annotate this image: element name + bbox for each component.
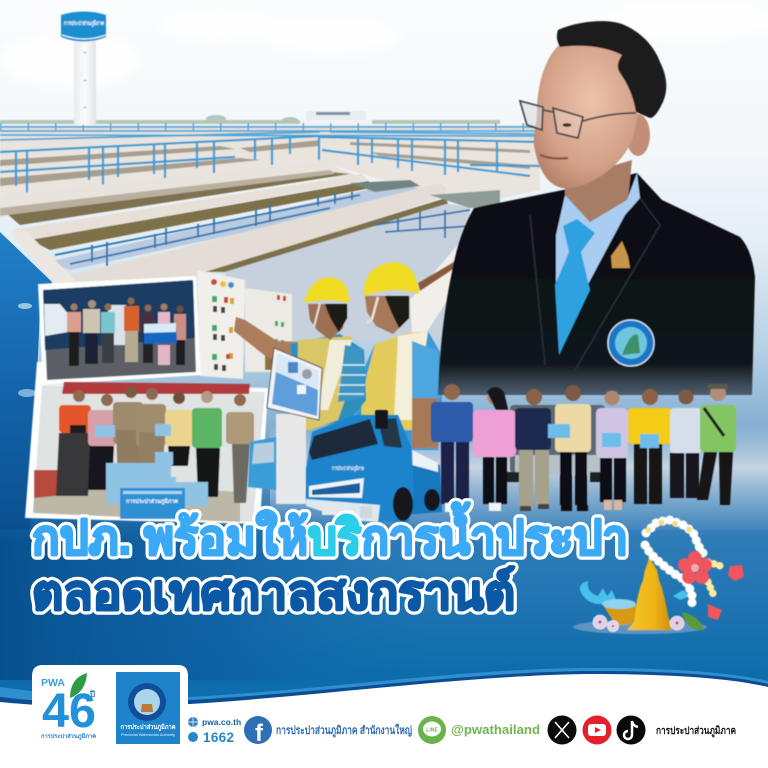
46th anniversary logo: 46 xyxy=(42,685,96,738)
lower left deep blue glow xyxy=(0,489,348,680)
horizon tree line xyxy=(0,115,500,124)
red flower xyxy=(678,551,712,584)
tiktok icon xyxy=(616,716,646,744)
headline line 1: กปภ. พร้อมให้บริการน้ำประปา xyxy=(32,502,628,565)
logo card xyxy=(32,665,188,768)
youtube icon xyxy=(582,716,612,744)
46th anniversary logo: ปี xyxy=(89,689,95,699)
golden sand stupa xyxy=(627,543,672,630)
far decks xyxy=(0,140,530,186)
headline line 2: ตลอดเทศกาลสงกรานต์ xyxy=(32,566,515,620)
social name: การประปาส่วนภูมิภาค xyxy=(656,725,736,738)
facebook: การประปาส่วนภูมิภาค สำนักงานใหญ่ xyxy=(276,723,412,738)
people xyxy=(56,386,254,503)
pin: royal emblem xyxy=(611,241,630,268)
Songkran decoration xyxy=(573,520,744,634)
upper water channel xyxy=(48,186,430,270)
woman in pink floral xyxy=(473,387,516,511)
headline xyxy=(32,502,628,620)
water tower xyxy=(61,12,106,125)
front railing left xyxy=(0,136,319,195)
line: @pwathailand xyxy=(451,722,540,737)
46th anniversary logo: PWA xyxy=(41,677,65,689)
control panel cabinets xyxy=(197,270,292,379)
neck xyxy=(565,160,632,222)
PWA emblem square: Provincial Waterworks Authority xyxy=(121,732,175,737)
people xyxy=(67,298,186,366)
lower water xyxy=(225,204,470,340)
purple flowers xyxy=(593,615,684,632)
face xyxy=(534,42,638,188)
man in floral shirt with water pack xyxy=(548,385,591,511)
water treatment plant photo xyxy=(0,111,540,340)
PWA emblem square xyxy=(116,672,180,744)
46th anniversary logo: การประปาส่วนภูมิภาค xyxy=(41,732,96,741)
tie xyxy=(555,219,595,355)
base shadow xyxy=(573,620,707,634)
jasmine garland xyxy=(645,520,724,607)
suit jacket xyxy=(438,173,755,395)
sky clouds xyxy=(0,2,768,86)
water bowl xyxy=(603,605,636,625)
reflected railing 1 xyxy=(55,192,360,266)
eye xyxy=(562,123,572,127)
distant building xyxy=(300,111,372,125)
website and hotline: 1662 xyxy=(203,730,234,745)
reflected railing 2 xyxy=(375,210,470,238)
website and hotline xyxy=(188,717,241,745)
lapel lines xyxy=(530,198,660,370)
donation sign: การประปาส่วนภูมิภาค xyxy=(126,497,178,506)
headline line 2: ตลอดเทศกาลสงกรานต์ xyxy=(32,566,515,620)
banner xyxy=(144,323,177,344)
x icon xyxy=(548,716,576,744)
water splash xyxy=(580,581,617,604)
green leaves xyxy=(682,612,704,630)
executive portrait xyxy=(438,21,755,395)
distant railings xyxy=(0,127,540,140)
left blue panel xyxy=(0,232,52,530)
photo 1: group with banner xyxy=(38,276,201,385)
shirt collar xyxy=(556,173,640,290)
worker 2 xyxy=(350,262,442,450)
glasses xyxy=(520,101,636,138)
woman in lilac floral xyxy=(596,390,628,510)
line: LINE xyxy=(426,728,438,734)
white car xyxy=(44,304,70,336)
facebook xyxy=(244,716,412,747)
dark trough xyxy=(5,172,350,225)
mouth xyxy=(540,155,568,159)
ear xyxy=(626,114,650,156)
red tassels xyxy=(708,565,744,620)
facebook: f xyxy=(255,720,264,747)
worker 1 pointing at panel xyxy=(234,277,366,430)
group of staff in front of truck xyxy=(431,384,736,512)
footer wave xyxy=(0,668,768,768)
donation sign xyxy=(120,488,185,519)
water bottle packs xyxy=(95,424,208,506)
info kiosk xyxy=(267,348,322,504)
photo 2: police and water donation xyxy=(25,362,268,524)
first inner beam xyxy=(12,174,368,240)
front railing right xyxy=(320,137,540,176)
man in green floral shirt with hat xyxy=(697,384,736,505)
ground behind group xyxy=(270,425,768,530)
small truck behind xyxy=(248,437,276,490)
blue water truck xyxy=(306,410,442,523)
website and hotline: pwa.co.th xyxy=(202,717,241,727)
PWA emblem square: การประปาส่วนภูมิภาค xyxy=(120,723,176,732)
tower label: การประปาส่วนภูมิภาค xyxy=(64,19,104,28)
grey pickup xyxy=(505,405,610,482)
man in dark floral shirt xyxy=(670,390,702,498)
pin: PWA round badge xyxy=(608,320,654,366)
dark water corner xyxy=(430,190,500,208)
second beam xyxy=(60,183,448,282)
left front wall xyxy=(10,230,75,290)
hair xyxy=(557,21,666,118)
main concrete wall xyxy=(0,162,360,208)
man in yellow shirt xyxy=(628,389,672,504)
line xyxy=(418,716,540,744)
man in navy polo xyxy=(515,389,551,511)
concrete deck xyxy=(0,125,540,205)
headline line 1: กปภ. พร้อมให้บริการน้ำประปา xyxy=(32,502,628,565)
man in blue shirt xyxy=(431,384,473,512)
right tank wall xyxy=(410,238,468,335)
truck label: การประปาส่วนภูมิภาค xyxy=(332,464,364,473)
